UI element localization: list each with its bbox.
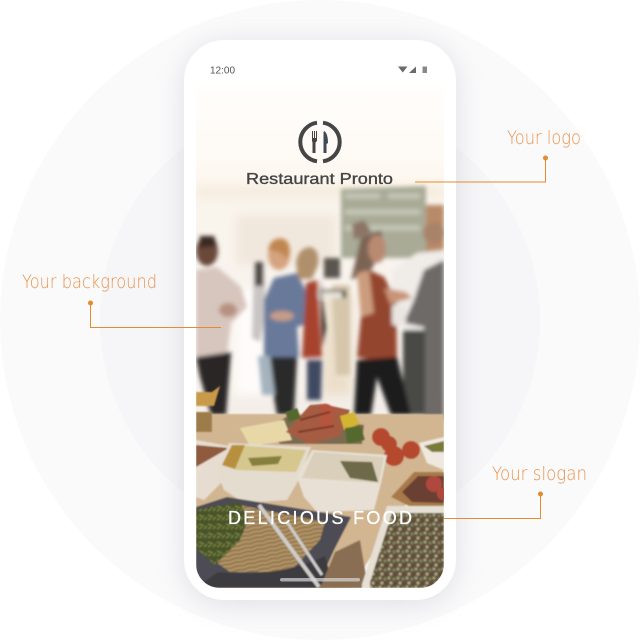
grain bowl [362, 506, 444, 588]
olive bowl [419, 437, 444, 470]
callout: your background: Your background [22, 271, 157, 293]
meat platter [278, 416, 364, 445]
left bowl [196, 440, 228, 500]
hummus bowl [217, 443, 311, 503]
woman red [302, 280, 322, 358]
callout: your logo [415, 127, 581, 182]
cream bowl [297, 450, 387, 512]
man left [196, 267, 247, 357]
table patch [320, 540, 368, 588]
logo: fork and knife [300, 123, 340, 161]
woman blue [264, 273, 309, 357]
phone body [184, 40, 456, 604]
small background figures [252, 262, 266, 342]
callout: your slogan [443, 463, 587, 518]
clock: 12:00 [210, 66, 235, 76]
callout: your logo: Your logo [507, 127, 581, 149]
buffet table with food [196, 386, 449, 590]
logo ring [300, 123, 340, 161]
home indicator [280, 578, 360, 582]
callout: your background [22, 271, 221, 328]
panel: background photo [196, 135, 444, 588]
pie [391, 472, 444, 508]
woman in rust dress [351, 230, 384, 280]
pasta bowl [196, 497, 351, 588]
status icons [398, 66, 427, 73]
callout: your slogan: Your slogan [492, 463, 587, 485]
knife [324, 131, 328, 153]
man right [423, 222, 445, 244]
tomatoes [372, 428, 420, 466]
back board [341, 186, 426, 258]
blurred restaurant crowd [196, 186, 445, 420]
serving tongs [259, 505, 322, 587]
status bar [210, 66, 427, 76]
fork [312, 131, 317, 153]
brand name: Restaurant Pronto [246, 171, 393, 188]
slogan: DELICIOUS FOOD [228, 508, 412, 528]
